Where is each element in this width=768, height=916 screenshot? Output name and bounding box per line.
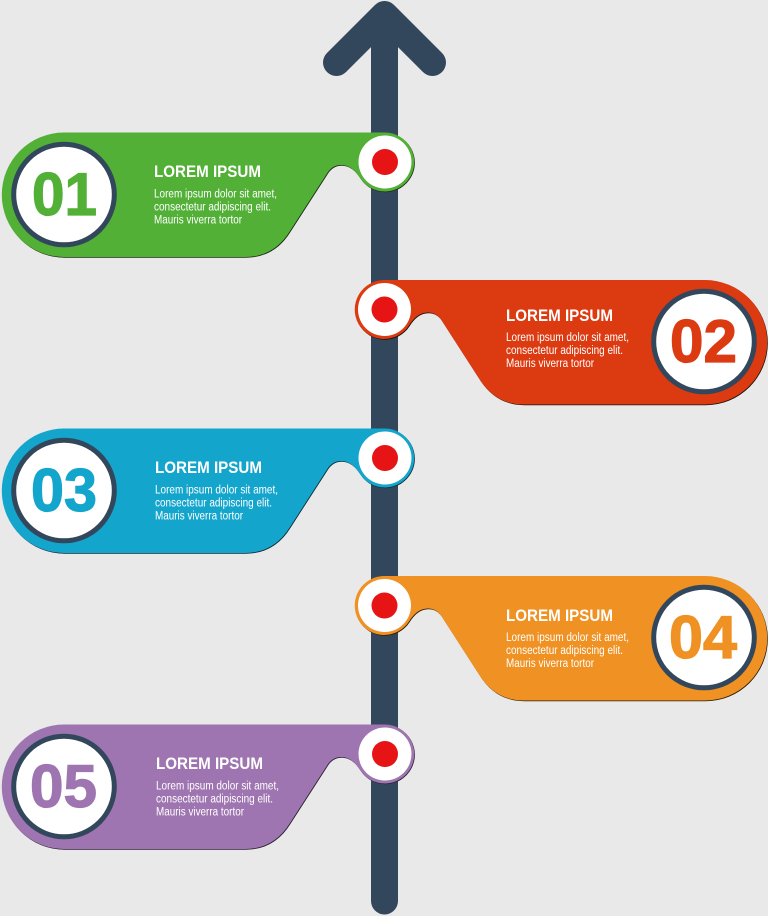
- body text 02: [506, 332, 629, 370]
- timeline arrow: [336, 14, 432, 901]
- body text 01: consectetur adipiscing elit.: [154, 202, 271, 214]
- body text 03: Mauris viverra tortor: [155, 510, 243, 522]
- body text 05: Mauris viverra tortor: [156, 806, 244, 818]
- body text 02: Mauris viverra tortor: [506, 358, 594, 370]
- marker 05: [358, 728, 412, 780]
- body text 04: [506, 632, 629, 670]
- heading 05: LOREM IPSUM: [156, 754, 263, 773]
- body text 04: Lorem ipsum dolor sit amet,: [506, 632, 629, 644]
- number badge 02: 02: [670, 308, 737, 375]
- number badge 01: [14, 144, 114, 245]
- marker 01: [358, 136, 412, 188]
- body text 03: consectetur adipiscing elit.: [155, 498, 272, 510]
- body text 04: Mauris viverra tortor: [506, 658, 594, 670]
- number badge 03: [14, 440, 114, 541]
- body text 01: Mauris viverra tortor: [154, 214, 242, 226]
- panel 04: orange: [355, 576, 768, 701]
- marker 04: [358, 579, 411, 632]
- number badge 05: [14, 736, 114, 837]
- body text 03: Lorem ipsum dolor sit amet,: [155, 484, 278, 496]
- marker 03: [358, 432, 412, 484]
- body text 02: Lorem ipsum dolor sit amet,: [506, 332, 629, 344]
- panel 01: green: [2, 132, 415, 258]
- number badge 04: [654, 587, 754, 688]
- body text 01: Lorem ipsum dolor sit amet,: [154, 188, 277, 200]
- body text 05: consectetur adipiscing elit.: [156, 794, 273, 806]
- panel 03: blue: [2, 428, 415, 554]
- heading 02: LOREM IPSUM: [506, 306, 613, 325]
- heading 01: LOREM IPSUM: [154, 162, 261, 181]
- body text 01: [154, 188, 277, 226]
- number badge 02: [654, 291, 754, 392]
- panel 05: purple: [2, 724, 415, 850]
- number badge 03: 03: [31, 457, 97, 524]
- panel 02: red: [355, 280, 768, 405]
- number badge 05: 05: [30, 753, 97, 820]
- heading 03: LOREM IPSUM: [155, 458, 262, 477]
- body text 05: Lorem ipsum dolor sit amet,: [156, 780, 279, 792]
- body text 02: consectetur adipiscing elit.: [506, 345, 623, 357]
- heading 04: LOREM IPSUM: [506, 606, 613, 625]
- body text 03: [155, 484, 278, 522]
- body text 04: consectetur adipiscing elit.: [506, 645, 623, 657]
- number badge 01: 01: [32, 161, 97, 228]
- marker 02: [358, 283, 411, 336]
- body text 05: [156, 780, 279, 818]
- number badge 04: 04: [669, 604, 738, 671]
